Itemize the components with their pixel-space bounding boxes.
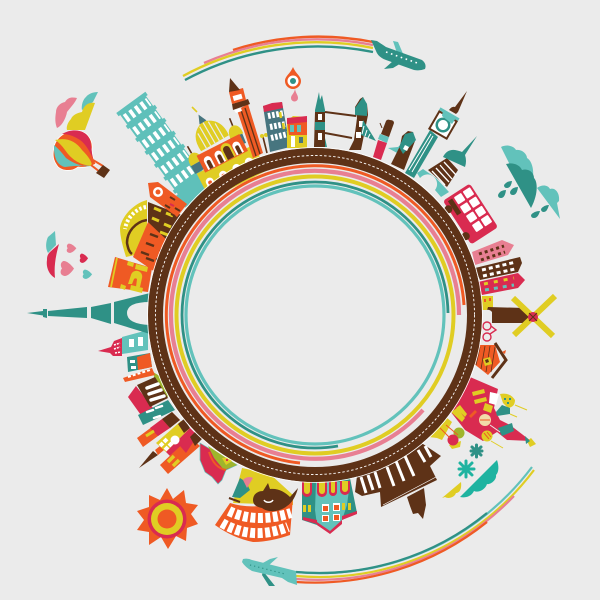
- orange gabled house: [148, 182, 187, 217]
- row houses and spire: [137, 412, 204, 474]
- Colosseum: [120, 200, 187, 272]
- domed building with arches: [417, 136, 477, 197]
- slate townhouse: [263, 102, 290, 152]
- rain clouds: [498, 146, 560, 219]
- top airplane: [371, 40, 426, 70]
- telephone box: [373, 120, 394, 160]
- Big Ben: [405, 91, 467, 178]
- Eiffel Tower: [27, 293, 150, 334]
- large gabled house: [128, 372, 175, 425]
- wooden cabin: [473, 343, 506, 378]
- fruit trees: [429, 418, 464, 449]
- narrow orange house: [123, 368, 155, 382]
- Russian church: [450, 377, 536, 448]
- double decker bus: [440, 183, 498, 247]
- St Mark's basilica: [181, 107, 267, 199]
- top rainbow trail: [183, 37, 373, 80]
- snowflakes: [459, 445, 482, 477]
- bottom airplane: [242, 557, 297, 586]
- spired townhouse: [98, 330, 148, 356]
- leaning tower of Pisa: [116, 92, 214, 208]
- Portuguese facade: [302, 478, 357, 534]
- Tower Bridge: [314, 92, 416, 170]
- teal and red house: [127, 353, 152, 372]
- clouds and hearts: [46, 231, 92, 279]
- Amsterdam canal houses: [472, 240, 525, 310]
- circular road: [148, 148, 482, 482]
- windmill: [483, 296, 555, 336]
- red and yellow townhouse: [287, 116, 307, 148]
- snow clouds: [442, 460, 498, 498]
- street lamp: [260, 133, 268, 153]
- rainbow rings: [166, 166, 464, 463]
- bicycle: [483, 322, 496, 341]
- clouds above balloon: [55, 92, 98, 130]
- folded carpet pattern: [200, 443, 237, 484]
- Spanish bull arena: [215, 468, 298, 542]
- hot air balloon: [53, 130, 110, 178]
- campanile tower: [229, 78, 263, 158]
- orange arch building: [108, 257, 152, 293]
- map pin drop: [285, 67, 301, 102]
- bottom rainbow trail: [296, 467, 534, 583]
- Roman colonnade: [355, 442, 441, 519]
- sun: [137, 488, 198, 549]
